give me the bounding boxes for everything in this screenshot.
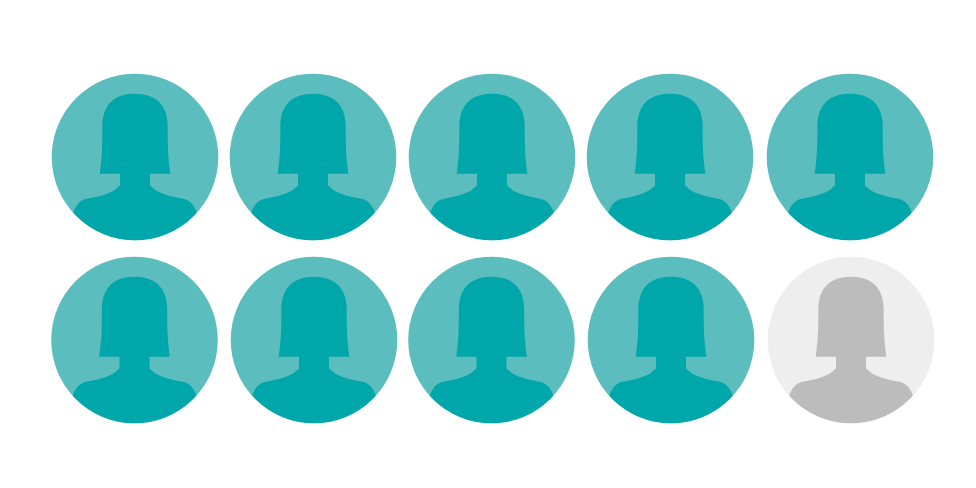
person 9 bbox=[588, 257, 754, 430]
person 6 bbox=[51, 257, 218, 430]
person 5 bbox=[767, 74, 933, 247]
person 3 bbox=[409, 74, 575, 247]
person 10: grey, not highlighted bbox=[768, 257, 934, 430]
person 4 bbox=[587, 74, 753, 247]
row 2 bbox=[51, 257, 934, 430]
person 7 bbox=[231, 257, 397, 430]
person 1 bbox=[52, 74, 218, 247]
row 1 bbox=[52, 74, 933, 247]
person 2 bbox=[230, 74, 396, 247]
person 8 bbox=[408, 257, 575, 430]
infographic: nine of ten people highlighted bbox=[51, 74, 934, 424]
